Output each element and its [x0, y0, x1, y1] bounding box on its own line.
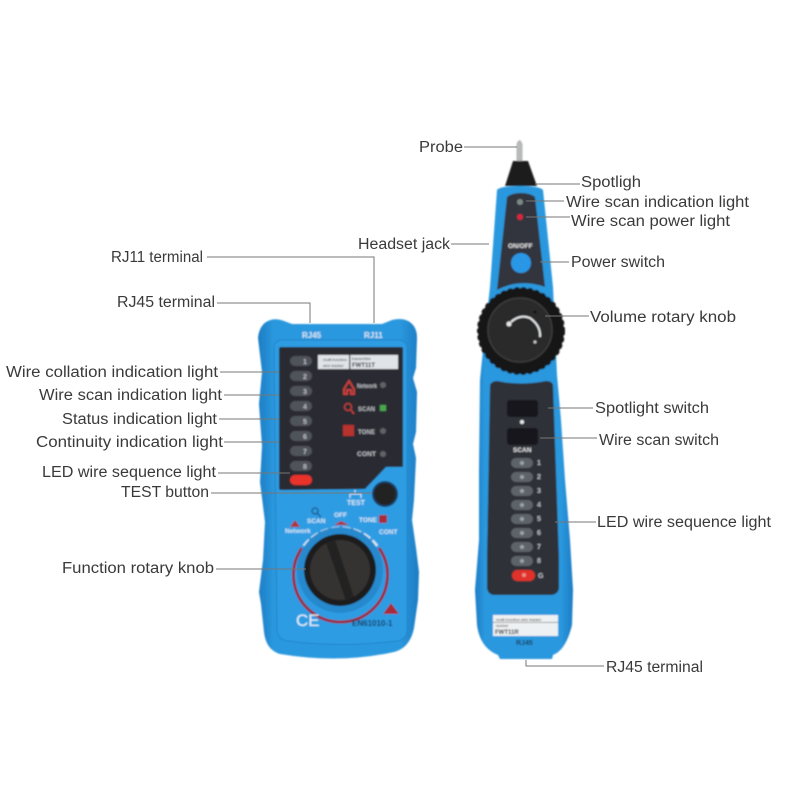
receiver sticker: FWT11R [495, 630, 519, 636]
receiver RJ45 label: RJ45 [516, 640, 533, 647]
LED sequence lights: 2 [537, 474, 541, 481]
selector markings: TONE [359, 517, 378, 524]
model sticker [318, 355, 398, 369]
LED sequence lights: 5 [537, 516, 541, 523]
selector markings [285, 508, 397, 546]
left callout labels: RJ11 terminal [111, 249, 203, 266]
left callout labels: Function rotary knob [62, 560, 214, 577]
right callout labels: Power switch [571, 254, 665, 271]
wire sequence lights: 8 [303, 464, 307, 471]
LED sequence lights [511, 458, 544, 581]
receiver sticker [493, 615, 558, 636]
volume rotary knob [478, 288, 564, 374]
LED sequence lights: 4 [537, 502, 541, 509]
standard mark [352, 603, 399, 628]
right callout labels: Wire scan switch [599, 432, 719, 449]
right callout labels: Headset jack [358, 236, 450, 253]
left callout labels: LED wire sequence light [42, 464, 217, 481]
wire sequence lights: 1 [303, 359, 307, 366]
device body [258, 319, 419, 659]
standard mark: EN61010-1 [352, 619, 393, 628]
wire sequence lights: 4 [303, 404, 307, 411]
LED sequence lights: 8 [537, 558, 541, 565]
test button [347, 481, 398, 507]
LED sequence lights: 1 [537, 460, 541, 467]
wire sequence lights: 3 [303, 389, 307, 396]
terminal labels: RJ11 [364, 331, 383, 340]
receiver probe device [475, 140, 573, 659]
callout lines [207, 147, 604, 666]
left callout labels: Continuity indication light [36, 434, 224, 451]
status indicators [343, 381, 386, 458]
LED sequence lights: 6 [537, 530, 541, 537]
model sticker: FWT11T [352, 363, 375, 369]
terminal labels: RJ45 [302, 331, 322, 340]
LED sequence lights: G [538, 573, 544, 580]
right callout labels: Spotlight switch [595, 400, 709, 417]
black nose [505, 161, 537, 186]
power light [517, 214, 523, 220]
right callout labels: Wire scan power light [571, 213, 731, 230]
left callout labels: RJ45 terminal [117, 294, 215, 311]
scan label: SCAN [513, 447, 532, 454]
selector markings: CONT [379, 529, 397, 536]
wire sequence lights: 7 [303, 449, 307, 456]
wire sequence lights [290, 356, 312, 485]
right callout labels: Spotligh [581, 174, 641, 191]
left callout labels: TEST button [121, 484, 209, 501]
left callout labels: Wire scan indication light [39, 387, 223, 404]
right callout labels: RJ45 terminal [606, 659, 703, 676]
test button: TEST [347, 500, 366, 507]
spotlight switch [507, 400, 538, 417]
receiver sticker: multi-function wire tracker [496, 617, 542, 622]
function rotary knob [293, 527, 387, 622]
model sticker: transmitter [352, 356, 372, 361]
transmitter device [258, 319, 419, 659]
LED sequence lights: 7 [537, 544, 541, 551]
metal probe tip [517, 140, 522, 162]
model sticker: multi-function [323, 357, 347, 362]
model sticker: wire tracker [323, 363, 344, 368]
right callout labels: LED wire sequence light [597, 514, 772, 531]
inner face [274, 340, 407, 644]
wire sequence lights: 6 [303, 434, 307, 441]
right callout labels: Probe [419, 139, 463, 156]
spotlight glyph [520, 420, 524, 424]
left callout labels: Status indication light [62, 411, 218, 428]
status indicators: SCAN [358, 406, 375, 413]
left callout labels: Wire collation indication light [6, 364, 219, 381]
selector markings: SCAN [307, 518, 326, 525]
scan indication light [517, 199, 523, 205]
probe body [475, 186, 573, 659]
right callout labels: Volume rotary knob [590, 309, 736, 326]
on/off label: ON/OFF [508, 243, 533, 250]
left callout labels [6, 249, 224, 577]
power button [511, 253, 531, 273]
upper control panel [497, 193, 545, 290]
wire sequence lights: 2 [303, 374, 307, 381]
LED sequence lights: 3 [537, 488, 541, 495]
scan switch [507, 428, 538, 445]
CE mark: CE [296, 611, 320, 630]
terminal labels [302, 331, 383, 340]
receiver sticker: receiver [496, 624, 509, 628]
right callout labels [358, 139, 772, 676]
status indicators: CONT [357, 451, 376, 458]
dark control panel [279, 347, 403, 490]
selector markings: Network [285, 528, 311, 535]
wire sequence lights: 5 [303, 419, 307, 426]
lower control panel [487, 381, 559, 595]
status indicators: TONE [358, 429, 376, 436]
right callout labels: Wire scan indication light [566, 194, 750, 211]
selector markings: OFF [334, 512, 347, 519]
status indicators: Network [357, 384, 378, 390]
